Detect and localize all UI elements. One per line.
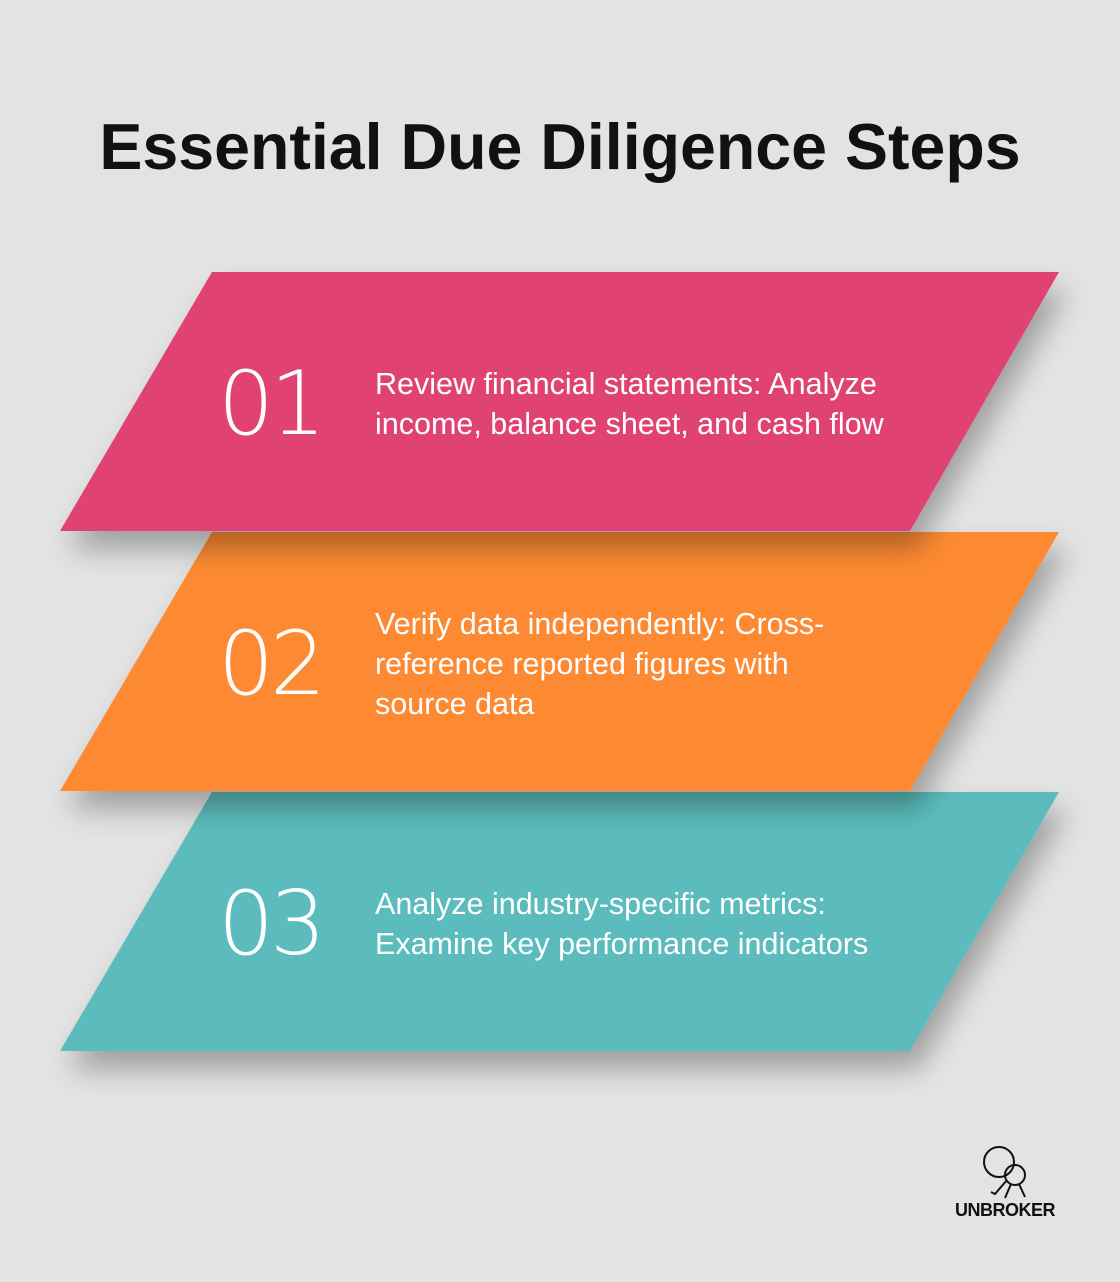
title: Essential Due Diligence Steps bbox=[99, 111, 1021, 183]
icon: keys bbox=[983, 1146, 1026, 1198]
step 03 text: Analyze industry-specific metrics: Examine key performance indicators bbox=[375, 887, 868, 961]
logo bbox=[955, 1146, 1056, 1220]
step 02 text: Verify data independently: Cross-reference reported figures with source data bbox=[375, 607, 824, 721]
band 3 teal bbox=[60, 792, 1059, 1051]
step 03 number: 03 bbox=[218, 872, 322, 975]
step 02 number: 02 bbox=[218, 612, 322, 715]
step 01 number: 01 bbox=[218, 352, 322, 455]
logo text: UNBROKER bbox=[955, 1200, 1055, 1220]
band 2 orange bbox=[60, 532, 1059, 791]
band 1 pink bbox=[60, 272, 1059, 531]
step 01 text: Review financial statements: Analyze income, balance sheet, and cash flow bbox=[375, 367, 884, 441]
